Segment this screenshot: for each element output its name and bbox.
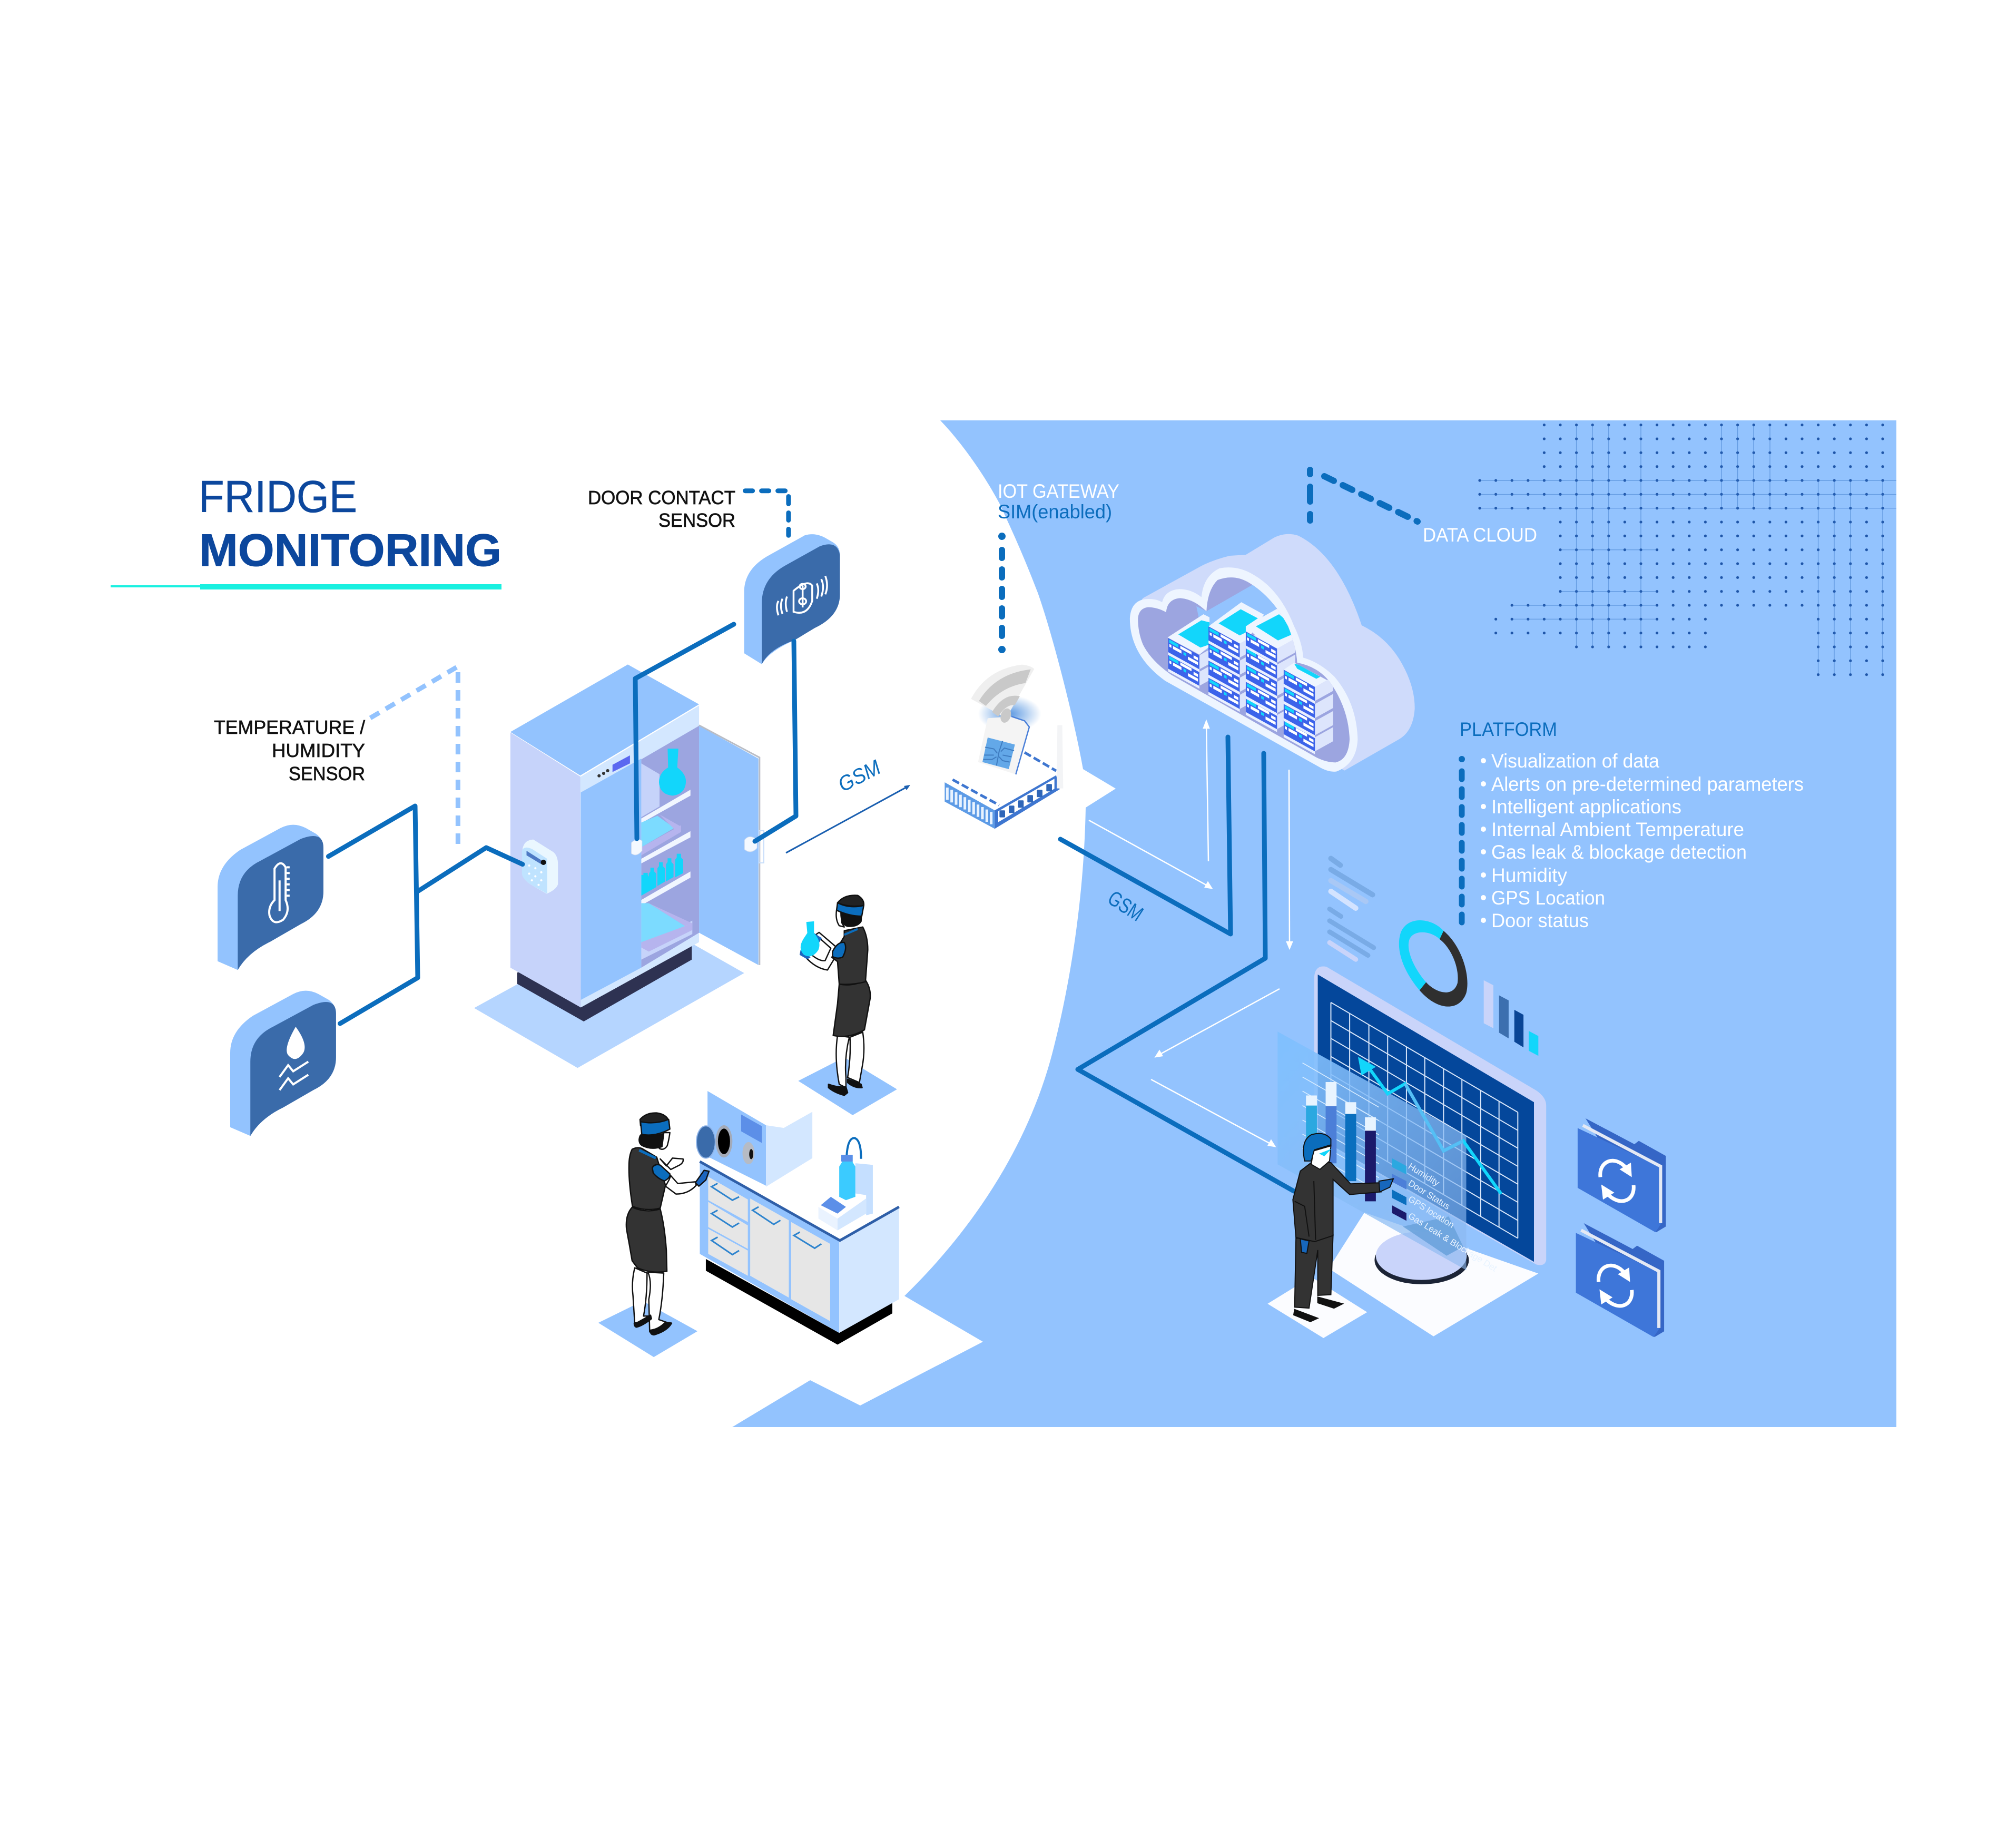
fridge top xyxy=(510,664,699,775)
floor under person xyxy=(1267,1277,1367,1338)
title: MONITORING xyxy=(199,525,501,576)
door sensor A xyxy=(631,840,642,855)
platform heading: PLATFORM xyxy=(1460,719,1557,740)
dotted grid pattern xyxy=(1472,418,1896,682)
list lines above monitor xyxy=(1331,859,1373,908)
cloud inner xyxy=(1138,577,1350,762)
monitor xyxy=(1314,966,1546,1265)
GSM link left: GSM xyxy=(834,755,884,797)
sensor bubbles and dashed connectors xyxy=(218,491,840,1136)
person: lower technician xyxy=(626,1113,709,1335)
tray lower xyxy=(641,903,685,944)
flask xyxy=(659,749,686,795)
folder with sync icon xyxy=(1578,1118,1666,1232)
icon: humidity bubble xyxy=(230,991,336,1136)
title xyxy=(111,472,501,589)
dashed connector: door sensor xyxy=(745,491,789,535)
dashed connector: gateway xyxy=(998,533,1006,653)
platform feature list: Internal Ambient Temperature xyxy=(1491,819,1744,840)
fridge floor xyxy=(474,917,744,1068)
lab machine xyxy=(696,1091,812,1187)
panel legend labels xyxy=(1406,1161,1499,1274)
label: temperature humidity sensor: TEMPERATURE / xyxy=(214,716,365,738)
fridge frame xyxy=(581,705,699,1007)
data cloud xyxy=(1130,534,1415,772)
fridge display xyxy=(597,755,630,778)
platform feature list: Humidity xyxy=(1491,864,1567,886)
cloud rim xyxy=(1130,567,1357,772)
label: temperature humidity sensor xyxy=(214,716,365,784)
fridge door right xyxy=(699,725,760,965)
fridge xyxy=(474,664,764,1068)
glow xyxy=(978,695,1041,732)
panel legend labels: Humidity xyxy=(1406,1161,1441,1188)
panel legend labels: Gas Leak & Blockage Det xyxy=(1406,1211,1499,1274)
platform feature list: Alerts on pre-determined parameters xyxy=(1491,773,1804,795)
lab scene xyxy=(598,896,899,1357)
platform feature list: Gas leak & blockage detection xyxy=(1491,841,1747,863)
cloud extrusion xyxy=(1133,534,1415,771)
platform feature list: Visualization of data xyxy=(1491,750,1659,772)
IoT gateway router xyxy=(945,665,1063,829)
server column C xyxy=(1246,608,1298,732)
dashed connector: temperature sensor xyxy=(370,666,458,848)
label: door contact sensor: DOOR CONTACT xyxy=(588,487,735,508)
IoT gateway labels: IOT GATEWAY xyxy=(998,480,1119,502)
label: temperature humidity sensor: SENSOR xyxy=(289,763,365,784)
label: door contact sensor: SENSOR xyxy=(658,509,735,531)
person: operator xyxy=(1293,1134,1393,1322)
folder with sync icon lower xyxy=(1576,1223,1664,1337)
bottle and tray xyxy=(819,1138,873,1231)
router top xyxy=(945,748,1056,810)
monitor grid xyxy=(1331,1002,1518,1238)
fridge plinth xyxy=(517,945,692,1021)
GSM link left xyxy=(786,755,910,853)
data cloud connector and label xyxy=(1310,470,1537,546)
panel legend labels: GPS location xyxy=(1406,1194,1456,1230)
small bar chart xyxy=(1484,980,1538,1056)
floor tile lower xyxy=(598,1301,697,1357)
platform dashboard scene xyxy=(1267,909,1666,1338)
network wires to cloud and monitor xyxy=(1060,737,1294,1191)
fridge interior xyxy=(641,726,699,968)
server column B xyxy=(1208,602,1264,712)
icon: thermometer bubble xyxy=(218,825,323,970)
antenna xyxy=(1057,725,1063,789)
wifi symbol xyxy=(971,665,1034,724)
temperature keypad sensor xyxy=(522,840,558,894)
label: temperature humidity sensor: HUMIDITY xyxy=(272,740,365,761)
door sensor B xyxy=(744,831,764,863)
data cloud connector and label: DATA CLOUD xyxy=(1423,524,1537,546)
servers xyxy=(1167,584,1333,754)
router left side xyxy=(945,782,995,829)
panel legend swatches xyxy=(1392,1158,1406,1221)
server column D xyxy=(1284,663,1333,754)
holographic panel xyxy=(1277,1031,1466,1270)
platform feature list xyxy=(1481,750,1804,931)
shelves xyxy=(641,790,691,823)
panel: blue cloud platform area xyxy=(732,420,1896,1427)
SIM card xyxy=(978,716,1029,774)
GSM label right: GSM xyxy=(1104,887,1147,926)
person: upper technician xyxy=(805,896,870,1095)
panel legend labels: Door Status xyxy=(1406,1178,1452,1212)
router front xyxy=(995,775,1060,829)
icon: door contact bubble xyxy=(744,534,840,664)
IoT gateway labels xyxy=(998,480,1119,523)
bottles xyxy=(641,854,683,896)
chart line xyxy=(1358,1057,1501,1194)
list lines decoration xyxy=(1330,909,1374,959)
floor under monitor xyxy=(1329,1212,1538,1336)
label: door contact sensor xyxy=(588,487,735,531)
title: FRIDGE xyxy=(199,472,357,522)
fridge side xyxy=(510,733,581,1007)
floor tile upper xyxy=(798,1057,897,1115)
platform feature list: Intelligent applications xyxy=(1491,796,1681,818)
server column A xyxy=(1167,614,1217,689)
monitor stand xyxy=(1374,1232,1469,1284)
donut chart xyxy=(1399,920,1468,1007)
sensor wires xyxy=(329,624,796,1024)
platform feature list: GPS Location xyxy=(1491,887,1605,909)
platform feature list: Door status xyxy=(1491,910,1589,931)
router dashes xyxy=(952,752,1056,805)
dashed connector: platform xyxy=(1459,756,1465,927)
flask held xyxy=(800,921,822,959)
tray upper xyxy=(641,816,674,847)
IoT gateway labels: SIM(enabled) xyxy=(998,501,1112,523)
fridge door left xyxy=(581,759,641,1000)
bench xyxy=(700,1111,899,1344)
white data-flow arrows xyxy=(1089,721,1292,1146)
